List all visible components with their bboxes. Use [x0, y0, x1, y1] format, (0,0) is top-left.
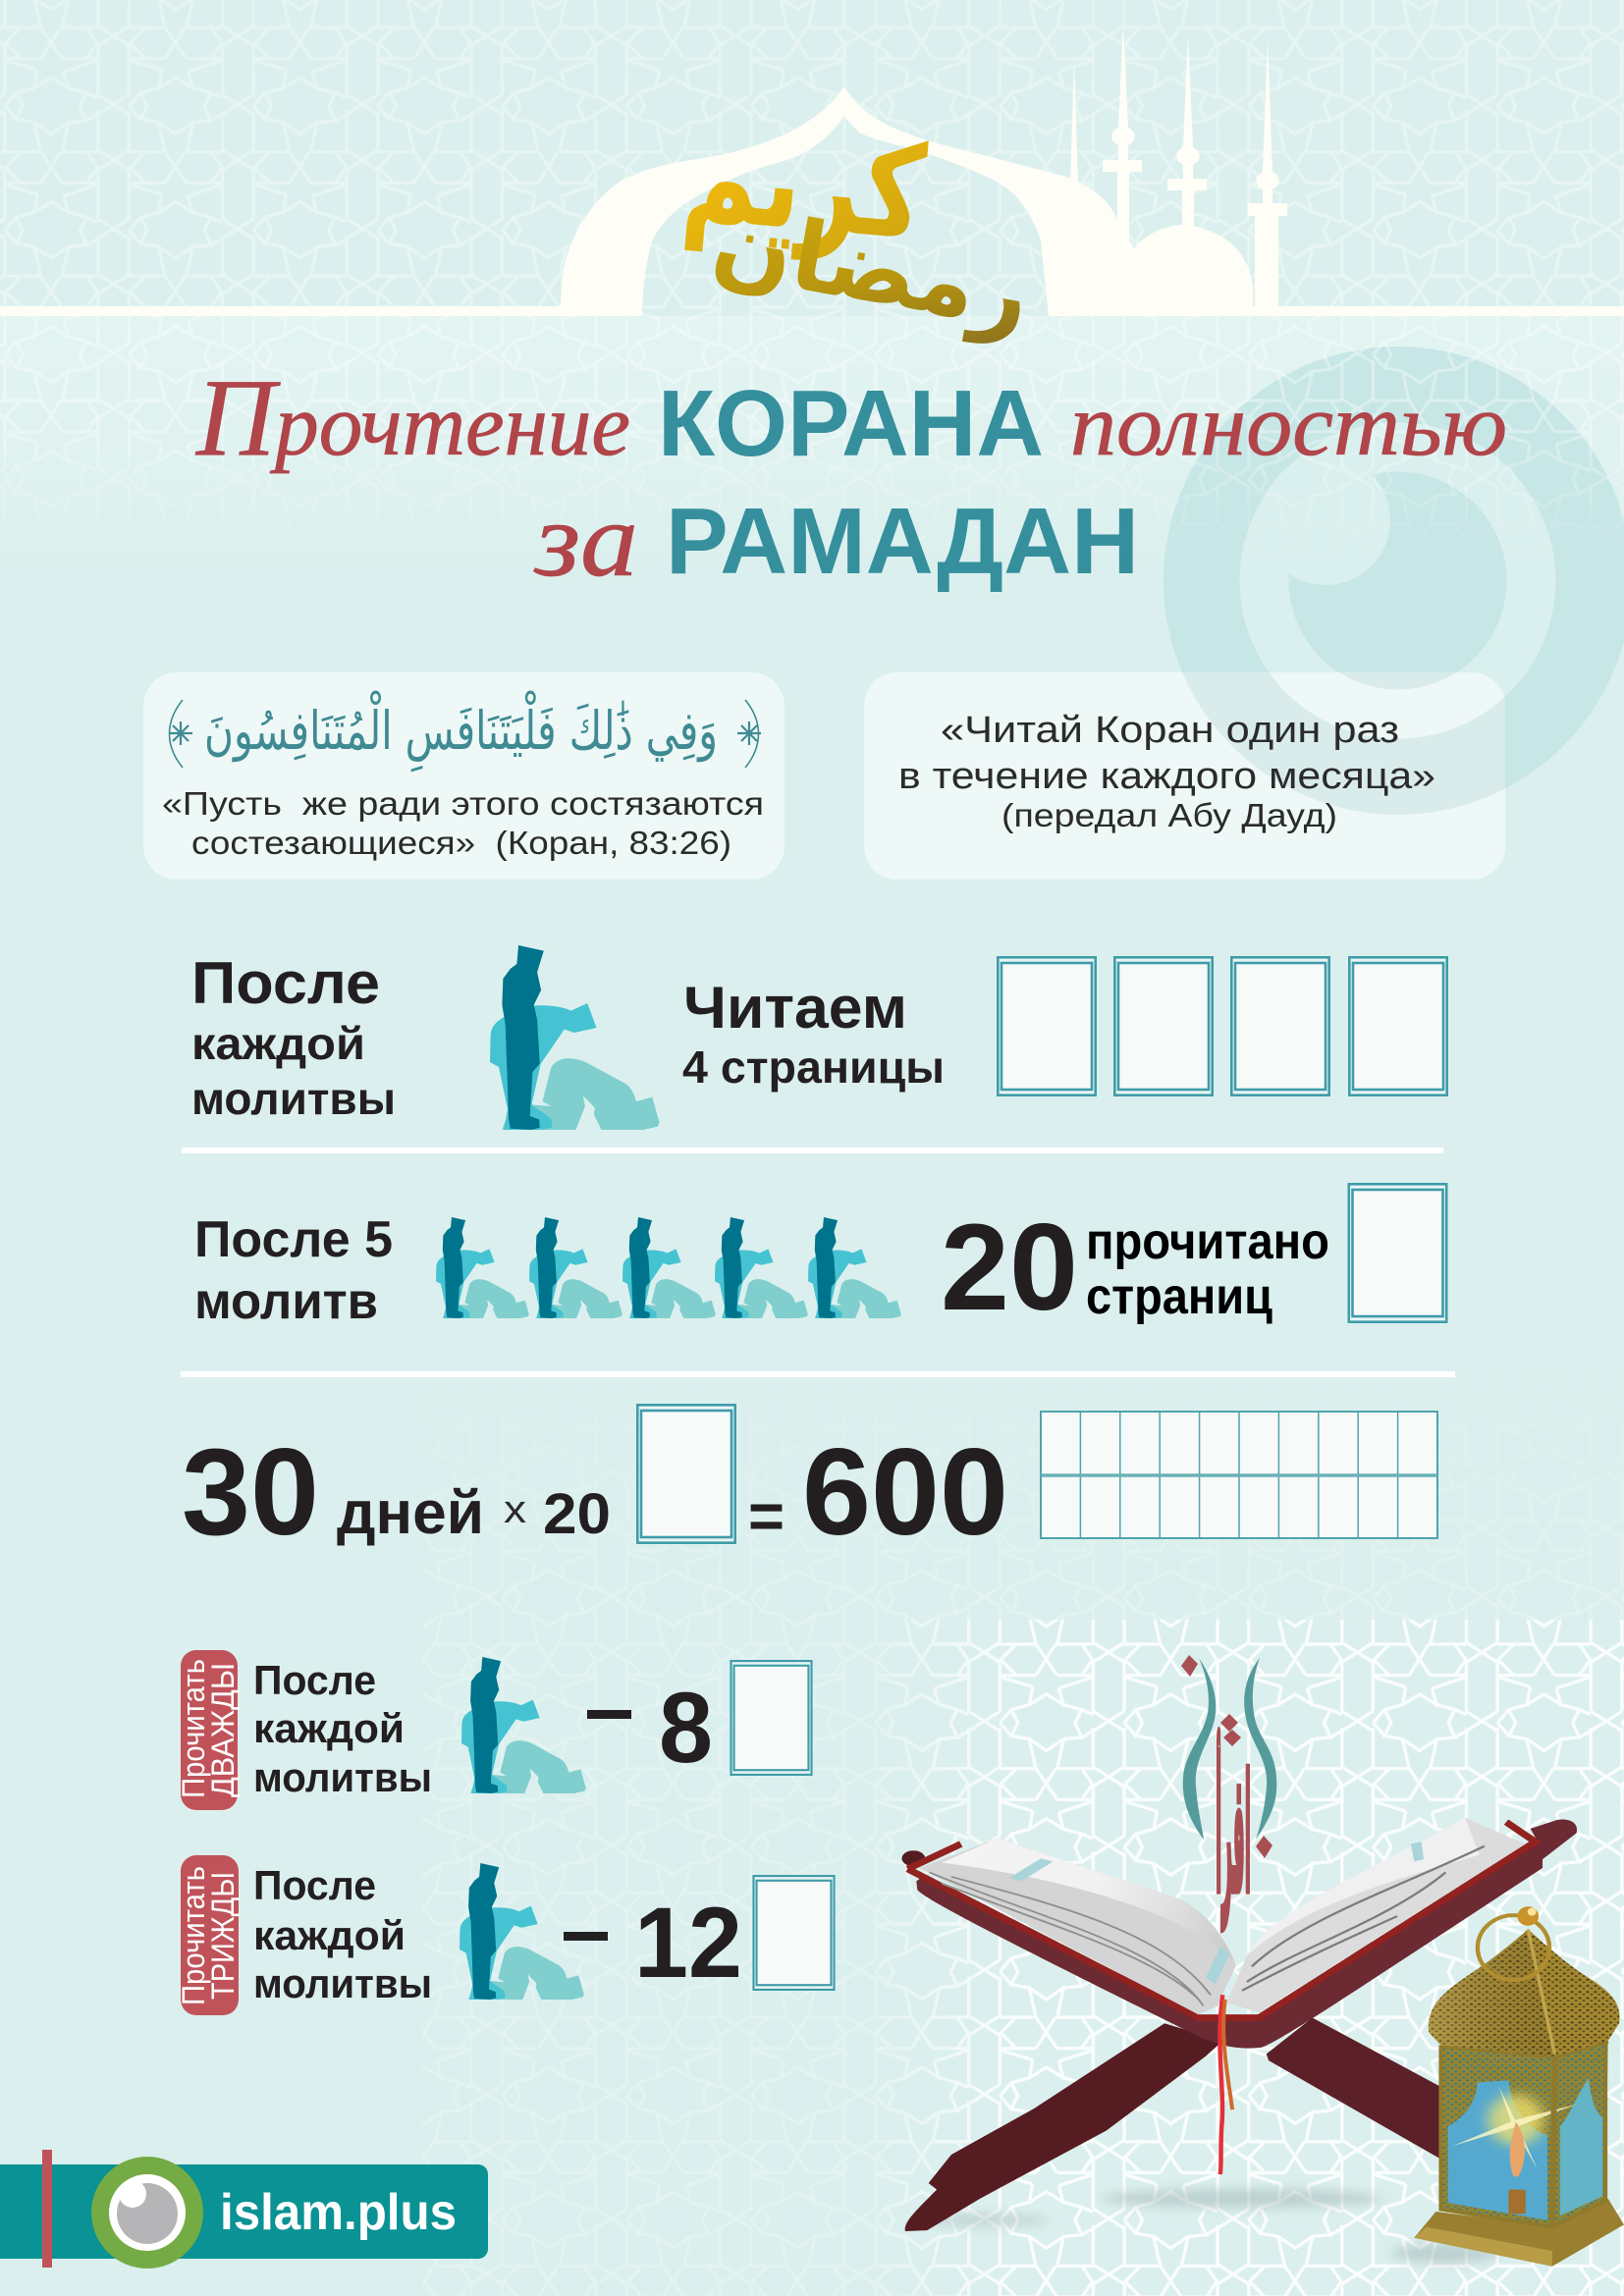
watermark logo [1164, 347, 1624, 815]
calligraphy: Iqra [1181, 1655, 1276, 1929]
panel: Quran verse: «Пусть же ради этого состязаются [162, 785, 764, 822]
title: Прочтение [195, 357, 630, 479]
row 5: read three times: молитвы [253, 1960, 432, 2006]
panel: hadith: в течение каждого месяца» [898, 756, 1435, 797]
icon: page [731, 1661, 812, 1775]
panel: hadith [864, 672, 1505, 880]
tag: read twice [176, 1650, 241, 1810]
icon: five prayer figures [436, 1217, 901, 1318]
footer logo: islam.plus: islam.plus [220, 2184, 457, 2241]
row 3: formula 30 days x 20 = 600: 600 [802, 1424, 1008, 1561]
mosque silhouette with white band [0, 25, 1624, 316]
calligraphy: Ramadan Kareem: كريم [677, 99, 931, 271]
icon: four pages [998, 957, 1447, 1095]
row 3: formula 30 days x 20 = 600: 30 [182, 1424, 319, 1561]
row 3: formula 30 days x 20 = 600: 20 [543, 1482, 611, 1546]
row 1: after each prayer: молитвы [191, 1073, 396, 1124]
row 1: after each prayer: каждой [191, 1018, 365, 1069]
row 1: after each prayer: 4 страницы [682, 1041, 945, 1093]
row 5: read three times: После [253, 1862, 376, 1908]
icon: prayer figures [490, 945, 660, 1130]
icon: page [1349, 1184, 1446, 1322]
row 4: read twice: каждой [253, 1705, 405, 1751]
tag: read three times: Прочитать [176, 1866, 211, 2005]
row 2: after five prayers: После 5 [194, 1211, 393, 1268]
row 5: read three times: каждой [253, 1912, 406, 1958]
tag: read twice: ДВАЖДЫ [205, 1663, 241, 1797]
calligraphy: Iqra: اقرأ [1216, 1731, 1251, 1929]
row 3: formula 30 days x 20 = 600 [182, 1405, 1437, 1561]
row 3: formula 30 days x 20 = 600: = [748, 1479, 785, 1552]
row 4: read twice: молитвы [253, 1754, 432, 1800]
row 2: after five prayers [194, 1184, 1446, 1336]
panel: hadith: «Читай Коран один раз [941, 710, 1399, 751]
row 3: formula 30 days x 20 = 600: х [504, 1488, 526, 1531]
row 2: after five prayers: 20 [941, 1200, 1078, 1336]
row 1: after each prayer [191, 945, 1447, 1130]
icon: page [637, 1405, 735, 1543]
row 2: after five prayers: страниц [1086, 1268, 1272, 1325]
title: за [533, 482, 638, 599]
title: РАМАДАН [666, 489, 1139, 594]
tag: read three times: ТРИЖДЫ [205, 1872, 241, 2000]
row 4: read twice: 8 [659, 1672, 713, 1784]
row 3: formula 30 days x 20 = 600: дней [337, 1479, 484, 1547]
tag: read twice: Прочитать [176, 1659, 211, 1798]
row 5: read three times [176, 1855, 835, 2015]
title: КОРАНА [658, 371, 1044, 476]
panel: Quran verse [143, 672, 785, 880]
icon: prayer figures [461, 1657, 586, 1793]
panel: Quran verse: وَفِي ذَٰلِكَ فَلْيَتَنَافَسِ الْمُتَنَافِسُونَ [204, 690, 718, 773]
tag: read three times [176, 1855, 241, 2015]
chart: grid of 20 pages [1041, 1412, 1437, 1538]
row 4: read twice: После [253, 1657, 376, 1703]
row 1: after each prayer: После [191, 950, 380, 1016]
row 4: read twice [176, 1650, 812, 1810]
title [195, 357, 1507, 599]
illustration: Quran on wooden stand [902, 1818, 1577, 2231]
icon: prayer figures [460, 1863, 584, 2000]
calligraphy: Ramadan Kareem: رمضان [705, 186, 1039, 351]
calligraphy: Ramadan Kareem [677, 99, 1039, 351]
panel: Quran verse: состезающиеся» (Коран, 83:26) [191, 825, 731, 861]
row 1: after each prayer: Читаем [683, 975, 907, 1041]
illustration: lantern [1392, 1906, 1624, 2267]
row 2: after five prayers: прочитано [1086, 1213, 1329, 1270]
footer logo: islam.plus [0, 2150, 488, 2269]
row 5: read three times: 12 [634, 1887, 742, 1999]
title: полностью [1070, 377, 1507, 474]
icon: page [753, 1876, 835, 1990]
row 2: after five prayers: молитв [194, 1273, 378, 1330]
icon: verse ornaments [169, 700, 761, 768]
panel: hadith: (передал Абу Дауд) [1001, 797, 1337, 833]
